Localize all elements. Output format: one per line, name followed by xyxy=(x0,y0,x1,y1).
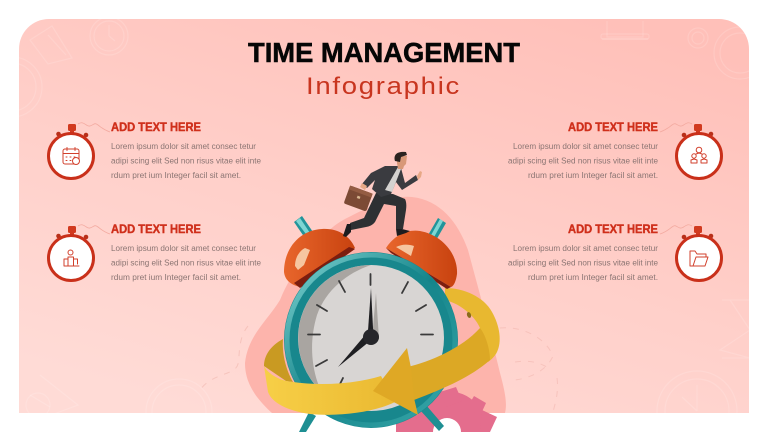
arrow head xyxy=(373,348,418,415)
body text: rdum pret ium Integer facil sit amet. xyxy=(111,171,241,180)
stopwatch icon: team xyxy=(660,123,722,178)
heading: ADD TEXT HERE xyxy=(111,222,201,236)
body text: adipi scing elit Sed non risus vitae elit inte xyxy=(508,258,658,268)
heading: ADD TEXT HERE xyxy=(568,222,658,236)
item: top left xyxy=(48,120,261,180)
hour ticks xyxy=(308,274,433,384)
body text: rdum pret ium Integer facil sit amet. xyxy=(111,273,241,282)
body text: adipi scing elit Sed non risus vitae elit inte xyxy=(111,156,261,166)
blob behind clock xyxy=(245,197,506,413)
item: bottom right xyxy=(508,222,722,282)
body text: Lorem ipsum dolor sit amet consec tetur xyxy=(513,244,658,253)
gear xyxy=(396,387,497,432)
ribbon mark xyxy=(466,311,472,319)
hand xyxy=(360,171,422,190)
heading: ADD TEXT HERE xyxy=(568,120,658,134)
item: top right xyxy=(508,120,722,180)
clock hands xyxy=(338,288,379,367)
body text: adipi scing elit Sed non risus vitae elit inte xyxy=(111,258,261,268)
head xyxy=(397,156,407,169)
shoes xyxy=(343,224,410,237)
stopwatch icon: folder xyxy=(660,225,722,280)
inner left of ribbon xyxy=(264,339,293,382)
body text xyxy=(111,244,261,282)
right bell xyxy=(386,218,457,289)
clock left leg xyxy=(299,412,316,432)
hair xyxy=(395,152,407,162)
arrow tail xyxy=(407,328,490,400)
left bell xyxy=(284,216,355,288)
body text: Lorem ipsum dolor sit amet consec tetur xyxy=(513,142,658,151)
jacket xyxy=(362,166,418,197)
heading: ADD TEXT HERE xyxy=(111,120,201,134)
dashed trail right xyxy=(500,328,558,412)
subtitle: Infographic xyxy=(306,73,461,100)
clock ring xyxy=(284,252,458,428)
title: TIME MANAGEMENT xyxy=(248,37,520,68)
clock face xyxy=(298,265,444,411)
back leg and trousers xyxy=(350,193,406,230)
briefcase xyxy=(344,185,373,212)
body text: Lorem ipsum dolor sit amet consec tetur xyxy=(111,142,256,151)
body text xyxy=(508,244,658,282)
stopwatch icon: calendar xyxy=(48,123,110,178)
body text xyxy=(111,142,261,180)
body text: rdum pret ium Integer facil sit amet. xyxy=(528,171,658,180)
item: bottom left xyxy=(48,222,261,282)
back band of ribbon xyxy=(445,288,500,362)
businessman running xyxy=(343,152,422,237)
body text: adipi scing elit Sed non risus vitae elit inte xyxy=(508,156,658,166)
yellow arrow ribbon xyxy=(264,311,490,415)
clock right leg xyxy=(420,405,444,431)
front band left xyxy=(264,366,395,415)
alarm clock xyxy=(284,216,458,432)
shirt and tie xyxy=(385,167,401,192)
body text: Lorem ipsum dolor sit amet consec tetur xyxy=(111,244,256,253)
body text xyxy=(508,142,658,180)
body text: rdum pret ium Integer facil sit amet. xyxy=(528,273,658,282)
stopwatch icon: leader xyxy=(48,225,110,280)
dashed trail left xyxy=(200,326,248,390)
